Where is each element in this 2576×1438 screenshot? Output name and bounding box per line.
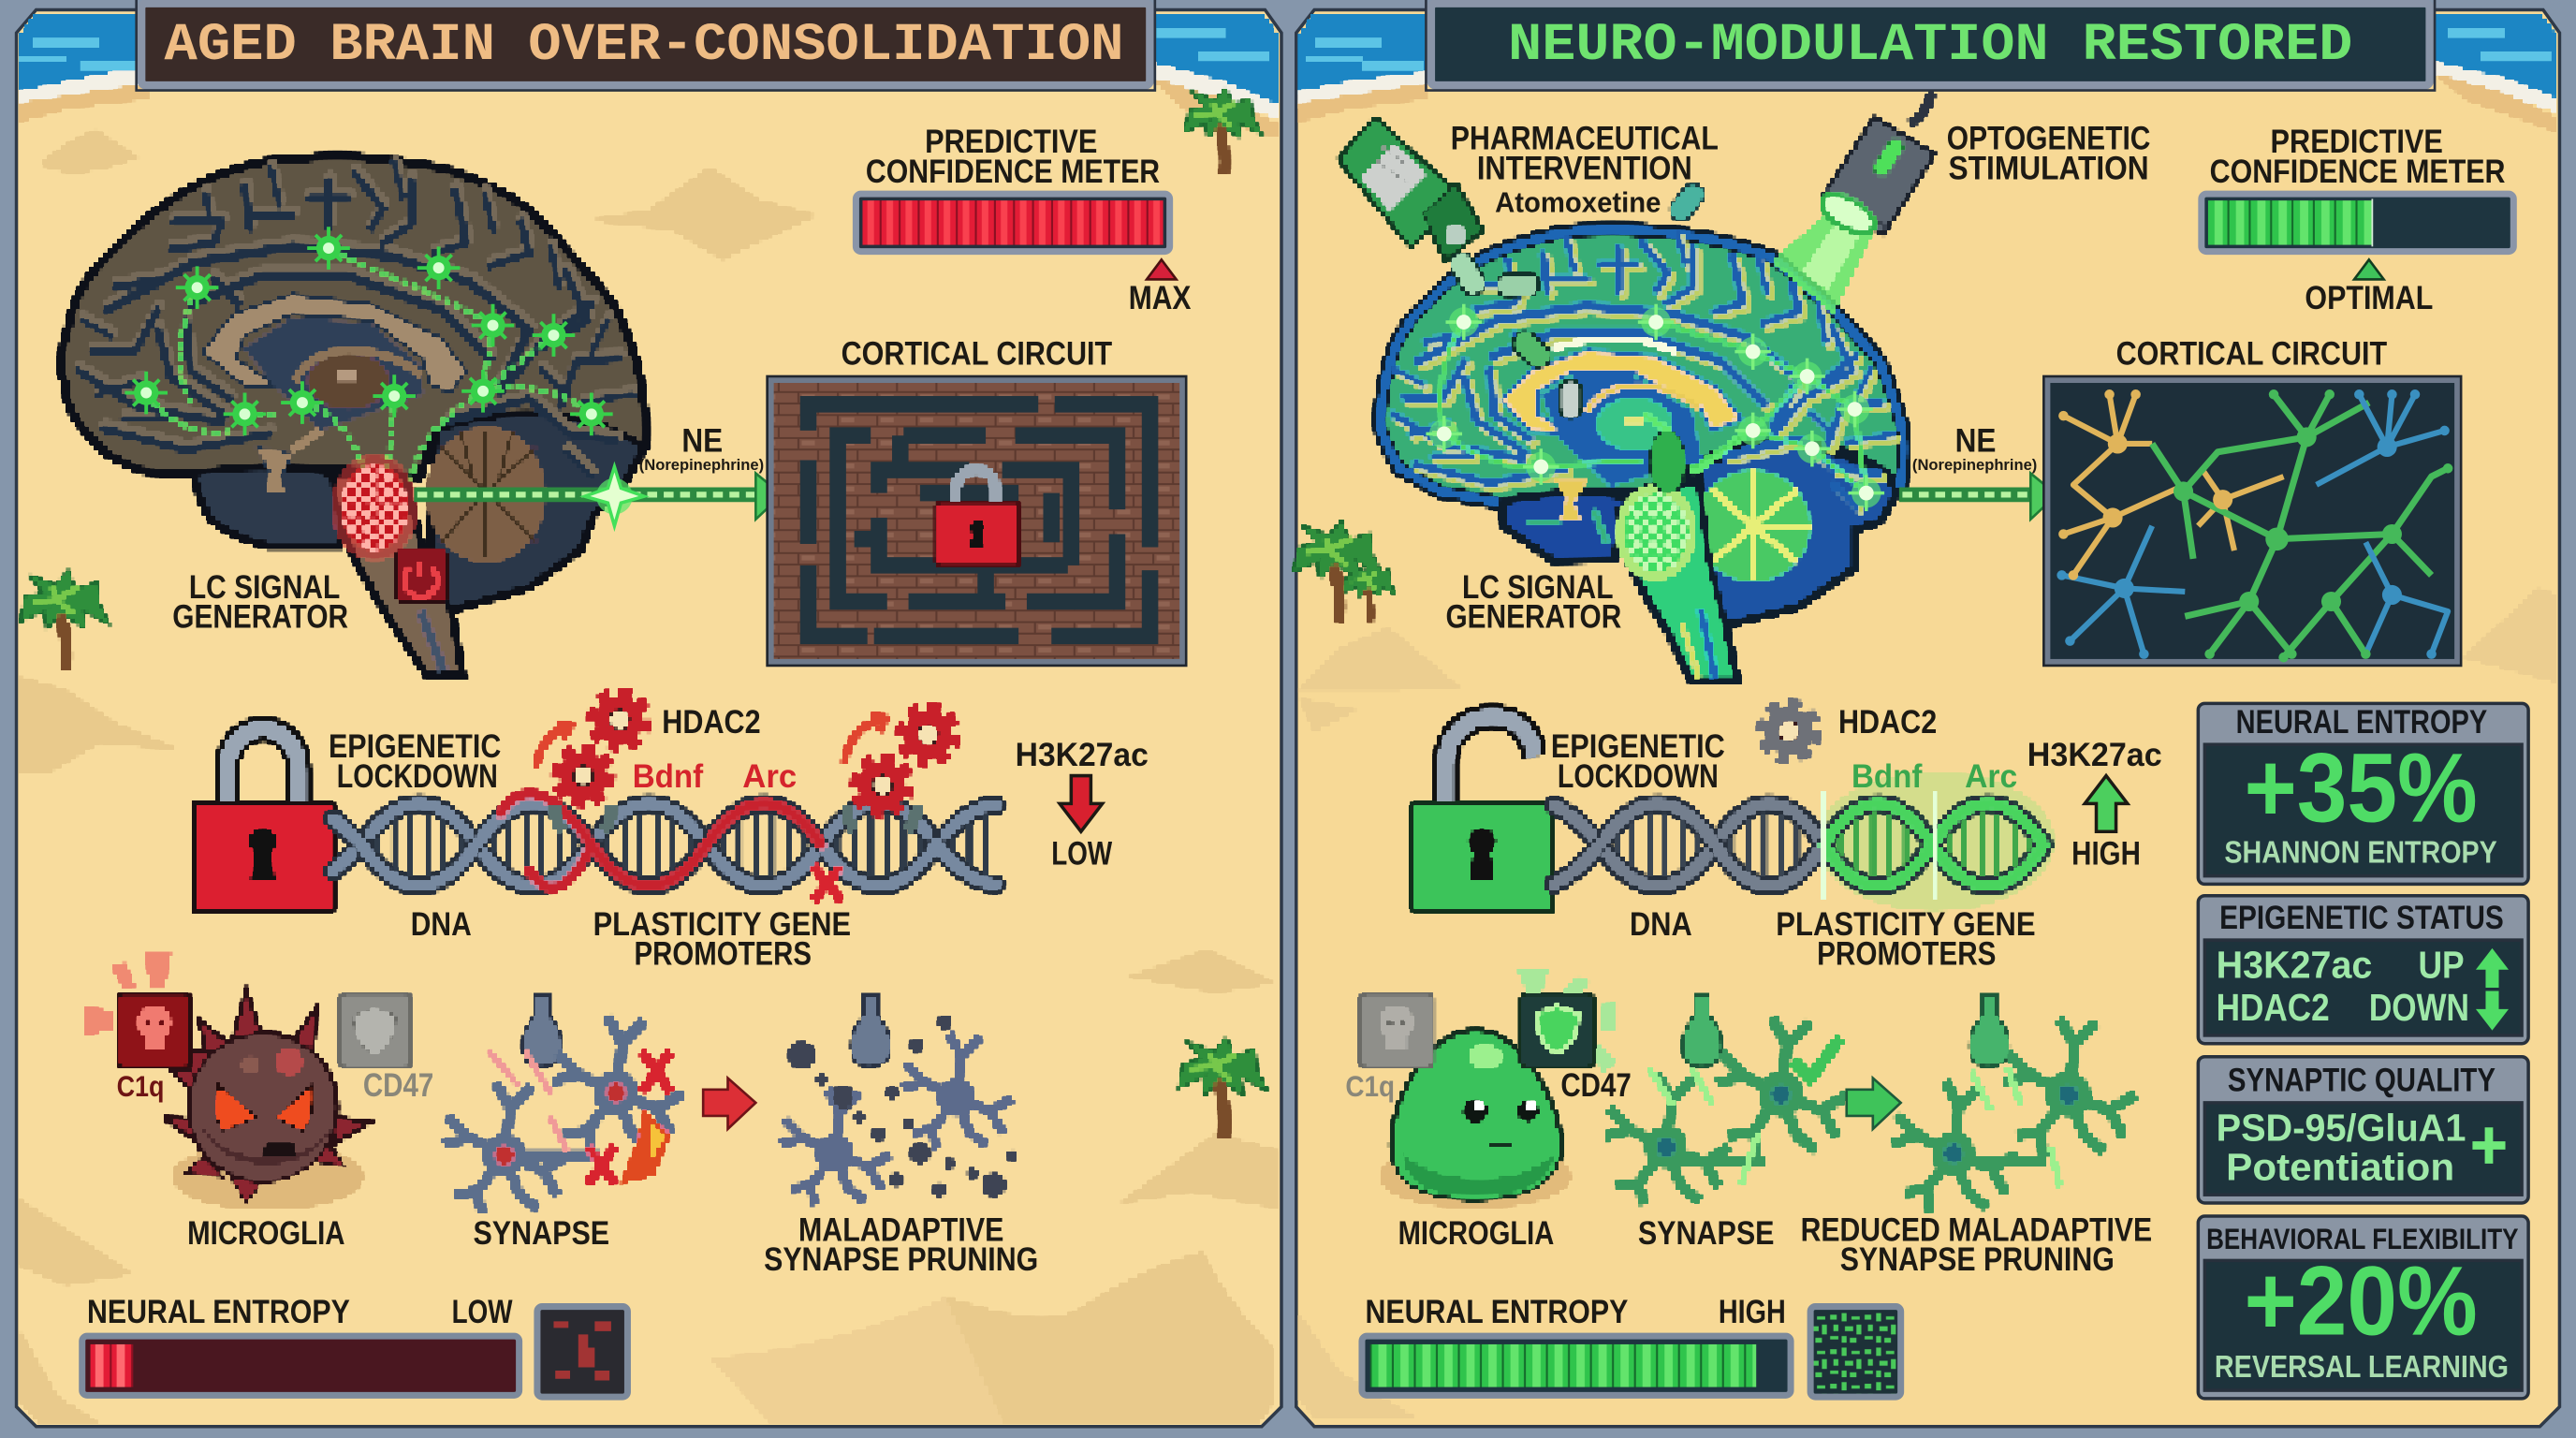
cerebellum xyxy=(427,427,546,562)
C1q icon with skull left xyxy=(85,953,191,1066)
stat card: synaptic quality: SYNAPTIC QUALITY xyxy=(2228,1063,2496,1099)
sand dunes right xyxy=(1299,588,2556,1416)
LC signal generator label right xyxy=(1445,569,1621,636)
predictive confidence meter right: PREDICTIVE xyxy=(2271,124,2443,160)
network: yellow neurons xyxy=(2063,394,2284,575)
LC signal generator label left: LC SIGNAL xyxy=(189,569,340,606)
gene labels left: Arc xyxy=(742,758,797,795)
stat card: epigenetic status: UP xyxy=(2419,943,2465,986)
predictive confidence meter right: OPTIMAL xyxy=(2305,280,2433,316)
epigenetic lockdown label left: EPIGENETIC xyxy=(329,728,501,765)
stat card: epigenetic status: EPIGENETIC STATUS xyxy=(2219,900,2504,936)
predictive confidence meter right xyxy=(2202,124,2513,316)
lower labels left: SYNAPSE PRUNING xyxy=(764,1241,1038,1278)
cerebellum blue lobe xyxy=(1701,444,1899,624)
LC signal generator label right: LC SIGNAL xyxy=(1462,569,1614,606)
DNA labels left: PLASTICITY GENE xyxy=(593,906,851,943)
aged brain illustration xyxy=(62,157,645,674)
optogenetic camera xyxy=(1818,92,1934,239)
icon: epigenetic padlock green open xyxy=(1412,717,1553,912)
brain stem xyxy=(333,477,461,674)
cortex xyxy=(1380,229,1904,503)
LC signal generator label left xyxy=(172,569,348,636)
neural entropy bar high: HIGH xyxy=(1719,1294,1786,1330)
light beam xyxy=(1773,215,1871,315)
lower labels right xyxy=(1398,1211,2152,1278)
cerebellum green xyxy=(1695,470,1810,581)
DNA labels right xyxy=(1630,906,2036,972)
DNA labels left xyxy=(411,906,851,972)
epigenetic lockdown label right xyxy=(1551,728,1725,795)
neural entropy bar high: NEURAL ENTROPY xyxy=(1365,1294,1628,1330)
pharmaceutical bottle xyxy=(1339,118,1482,259)
glowing nodes right xyxy=(1426,304,1884,511)
synapse healthy xyxy=(1610,996,1843,1200)
gene labels right xyxy=(1852,758,2017,795)
lower labels left: SYNAPSE xyxy=(473,1215,609,1252)
restored brain illustration xyxy=(1380,229,1904,681)
epigenetic lockdown label left xyxy=(329,728,501,795)
H3K27ac high indicator xyxy=(2027,737,2162,872)
stat card: behavioral flexibility: REVERSAL LEARNING xyxy=(2215,1350,2509,1385)
neural entropy bar high xyxy=(1362,1294,1791,1395)
predictive confidence meter left: MAX xyxy=(1129,280,1192,316)
panel: neuro-modulation restored xyxy=(1294,0,2559,1427)
title plate left: AGED BRAIN OVER-CONSOLIDATION xyxy=(165,15,1123,75)
lower labels left: MALADAPTIVE xyxy=(798,1211,1003,1248)
LC signal generator label left: GENERATOR xyxy=(172,599,348,636)
DNA labels left: PROMOTERS xyxy=(634,935,812,972)
temporal lobe blue xyxy=(1501,492,1627,561)
C1q label right: C1q xyxy=(1345,1069,1395,1103)
predictive confidence meter right: CONFIDENCE METER xyxy=(2210,154,2506,190)
gene labels right: Arc xyxy=(1965,758,2017,795)
optogenetic stimulation label xyxy=(1947,121,2150,186)
predictive confidence meter left: CONFIDENCE METER xyxy=(866,154,1160,190)
DNA labels left: DNA xyxy=(411,906,472,943)
stat card: synaptic quality xyxy=(2198,1057,2528,1203)
icon: red padlock circuit xyxy=(936,470,1018,565)
NE pathways xyxy=(146,248,592,480)
cortex xyxy=(62,157,645,477)
NE arrow left xyxy=(414,467,782,526)
HDAC2 label left: HDAC2 xyxy=(662,704,761,741)
entropy display high xyxy=(1810,1307,1901,1397)
stat card: neural entropy: SHANNON ENTROPY xyxy=(2224,836,2497,871)
icon: epigenetic padlock red xyxy=(194,729,333,912)
icon: palm trees right xyxy=(1294,521,1395,622)
H3K27ac low indicator xyxy=(1016,737,1149,872)
LC signal generator label right: GENERATOR xyxy=(1445,599,1621,636)
stat card: epigenetic status: HDAC2 xyxy=(2217,986,2330,1029)
icon: green arrow xyxy=(1847,1078,1901,1129)
NE label right: (Norepinephrine) xyxy=(1912,456,2037,474)
DNA labels right: PROMOTERS xyxy=(1817,935,1996,972)
panel: aged brain over-consolidation xyxy=(17,0,1281,1427)
neural entropy bar low: LOW xyxy=(452,1294,513,1330)
NE label left: NE xyxy=(681,423,723,460)
thalamus green xyxy=(1597,398,1673,450)
predictive confidence meter left: PREDICTIVE xyxy=(925,124,1097,160)
HDAC2 label right: HDAC2 xyxy=(1838,704,1937,741)
lower labels right: SYNAPSE PRUNING xyxy=(1840,1241,2115,1278)
DNA helix left xyxy=(333,794,996,901)
icons: palm trees left panel xyxy=(21,89,1266,1137)
cortical circuit healthy network: CORTICAL CIRCUIT xyxy=(2116,336,2388,373)
HDAC2 gear gray xyxy=(1764,707,1814,756)
epigenetic lockdown label left: LOCKDOWN xyxy=(337,758,498,795)
cortical circuit locked maze xyxy=(768,336,1186,666)
sand dunes left xyxy=(20,130,1277,1423)
microglia healthy blob xyxy=(1380,1031,1571,1208)
neural entropy bar low xyxy=(82,1294,520,1395)
H3K27ac low indicator: LOW xyxy=(1051,835,1113,872)
stat card: behavioral flexibility: +20% xyxy=(2244,1246,2478,1356)
stat card: behavioral flexibility xyxy=(2198,1216,2528,1399)
optogenetic stimulation label: OPTOGENETIC xyxy=(1947,121,2150,157)
synapse reduced pruning xyxy=(1897,996,2130,1207)
LC green node xyxy=(1617,485,1695,580)
H3K27ac high indicator: HIGH xyxy=(2071,835,2141,872)
H3K27ac high indicator: H3K27ac xyxy=(2027,737,2162,773)
LC red node xyxy=(332,455,417,561)
CD47 shield icon left xyxy=(340,994,411,1066)
temporal lobe xyxy=(194,467,345,546)
corpus callosum yellow xyxy=(1501,350,1741,433)
stat card: behavioral flexibility: BEHAVIORAL FLEXIBILITY xyxy=(2206,1222,2519,1255)
DNA helix right xyxy=(1554,772,2054,911)
lower labels right: REDUCED MALADAPTIVE xyxy=(1801,1211,2152,1248)
network: green neurons xyxy=(2152,394,2448,657)
beach scene left xyxy=(20,13,1278,138)
gene labels left: Bdnf xyxy=(633,758,703,795)
optogenetic stimulation label: STIMULATION xyxy=(1949,150,2149,186)
predictive confidence meter left xyxy=(856,124,1192,316)
NE label left xyxy=(639,423,764,474)
C1q icon skull gray right xyxy=(1360,994,1432,1066)
stat card: epigenetic status: H3K27ac xyxy=(2217,943,2372,986)
title plate left xyxy=(137,0,1155,91)
pharmaceutical intervention label xyxy=(1451,121,1719,218)
C1q label left: C1q xyxy=(117,1069,165,1103)
corpus callosum xyxy=(202,294,466,393)
stat card: neural entropy: +35% xyxy=(2244,734,2478,844)
stat card: epigenetic status xyxy=(2198,896,2528,1044)
lower labels left xyxy=(187,1211,1038,1278)
thalamus xyxy=(307,353,389,409)
NE arrow right xyxy=(1899,474,2056,520)
entropy display low xyxy=(537,1307,627,1397)
NE label right: NE xyxy=(1955,423,1996,460)
cortical circuit locked maze: CORTICAL CIRCUIT xyxy=(842,336,1113,373)
NE label left: (Norepinephrine) xyxy=(639,456,764,474)
cerebellum dark lobe xyxy=(431,413,644,609)
lower labels left: MICROGLIA xyxy=(187,1215,345,1252)
CD47 label right: CD47 xyxy=(1560,1067,1632,1104)
CD47 shield icon green right xyxy=(1518,970,1617,1072)
stat card: neural entropy xyxy=(2198,703,2528,884)
stat card: epigenetic status: DOWN xyxy=(2369,986,2469,1029)
maladaptive pruning debris xyxy=(784,996,1017,1201)
epigenetic lockdown label right: EPIGENETIC xyxy=(1551,728,1725,765)
glowing nodes left xyxy=(124,227,613,435)
gene labels right: Bdnf xyxy=(1852,758,1923,795)
pharmaceutical intervention label: INTERVENTION xyxy=(1477,150,1692,186)
H3K27ac low indicator: H3K27ac xyxy=(1016,737,1149,773)
neural entropy bar low: NEURAL ENTROPY xyxy=(87,1294,350,1330)
synapse damaged xyxy=(448,996,679,1209)
CD47 label left: CD47 xyxy=(363,1067,433,1104)
DNA labels right: DNA xyxy=(1630,906,1692,943)
lower labels right: MICROGLIA xyxy=(1398,1215,1554,1252)
stat card: synaptic quality: PSD-95/GluA1 xyxy=(2217,1106,2466,1149)
pharmaceutical intervention label: Atomoxetine xyxy=(1495,185,1661,218)
title plate right xyxy=(1426,0,2435,91)
microglia activated xyxy=(165,992,368,1210)
stat card: synaptic quality: Potentiation xyxy=(2226,1145,2454,1188)
epigenetic lockdown label right: LOCKDOWN xyxy=(1558,758,1719,795)
pills xyxy=(1448,181,1707,418)
icon: red arrow xyxy=(703,1078,755,1129)
brain stem green xyxy=(1617,480,1736,681)
cortical circuit healthy network xyxy=(2043,336,2461,666)
gene labels left xyxy=(633,758,797,795)
NE pathways right xyxy=(1441,322,1866,493)
stat card: neural entropy: NEURAL ENTROPY xyxy=(2236,704,2487,741)
NE label right xyxy=(1912,423,2037,474)
outer cortex folds xyxy=(80,159,634,472)
lower labels right: SYNAPSE xyxy=(1638,1215,1775,1252)
pharmaceutical intervention label: PHARMACEUTICAL xyxy=(1451,121,1719,157)
title plate right: NEURO-MODULATION RESTORED xyxy=(1508,15,2352,75)
network: blue neurons xyxy=(2062,394,2448,654)
cortex folds right xyxy=(1393,234,1897,510)
beach scene right xyxy=(1299,13,2556,131)
DNA labels right: PLASTICITY GENE xyxy=(1776,906,2036,943)
HDAC2 gears left xyxy=(535,696,953,829)
power button xyxy=(396,549,446,601)
